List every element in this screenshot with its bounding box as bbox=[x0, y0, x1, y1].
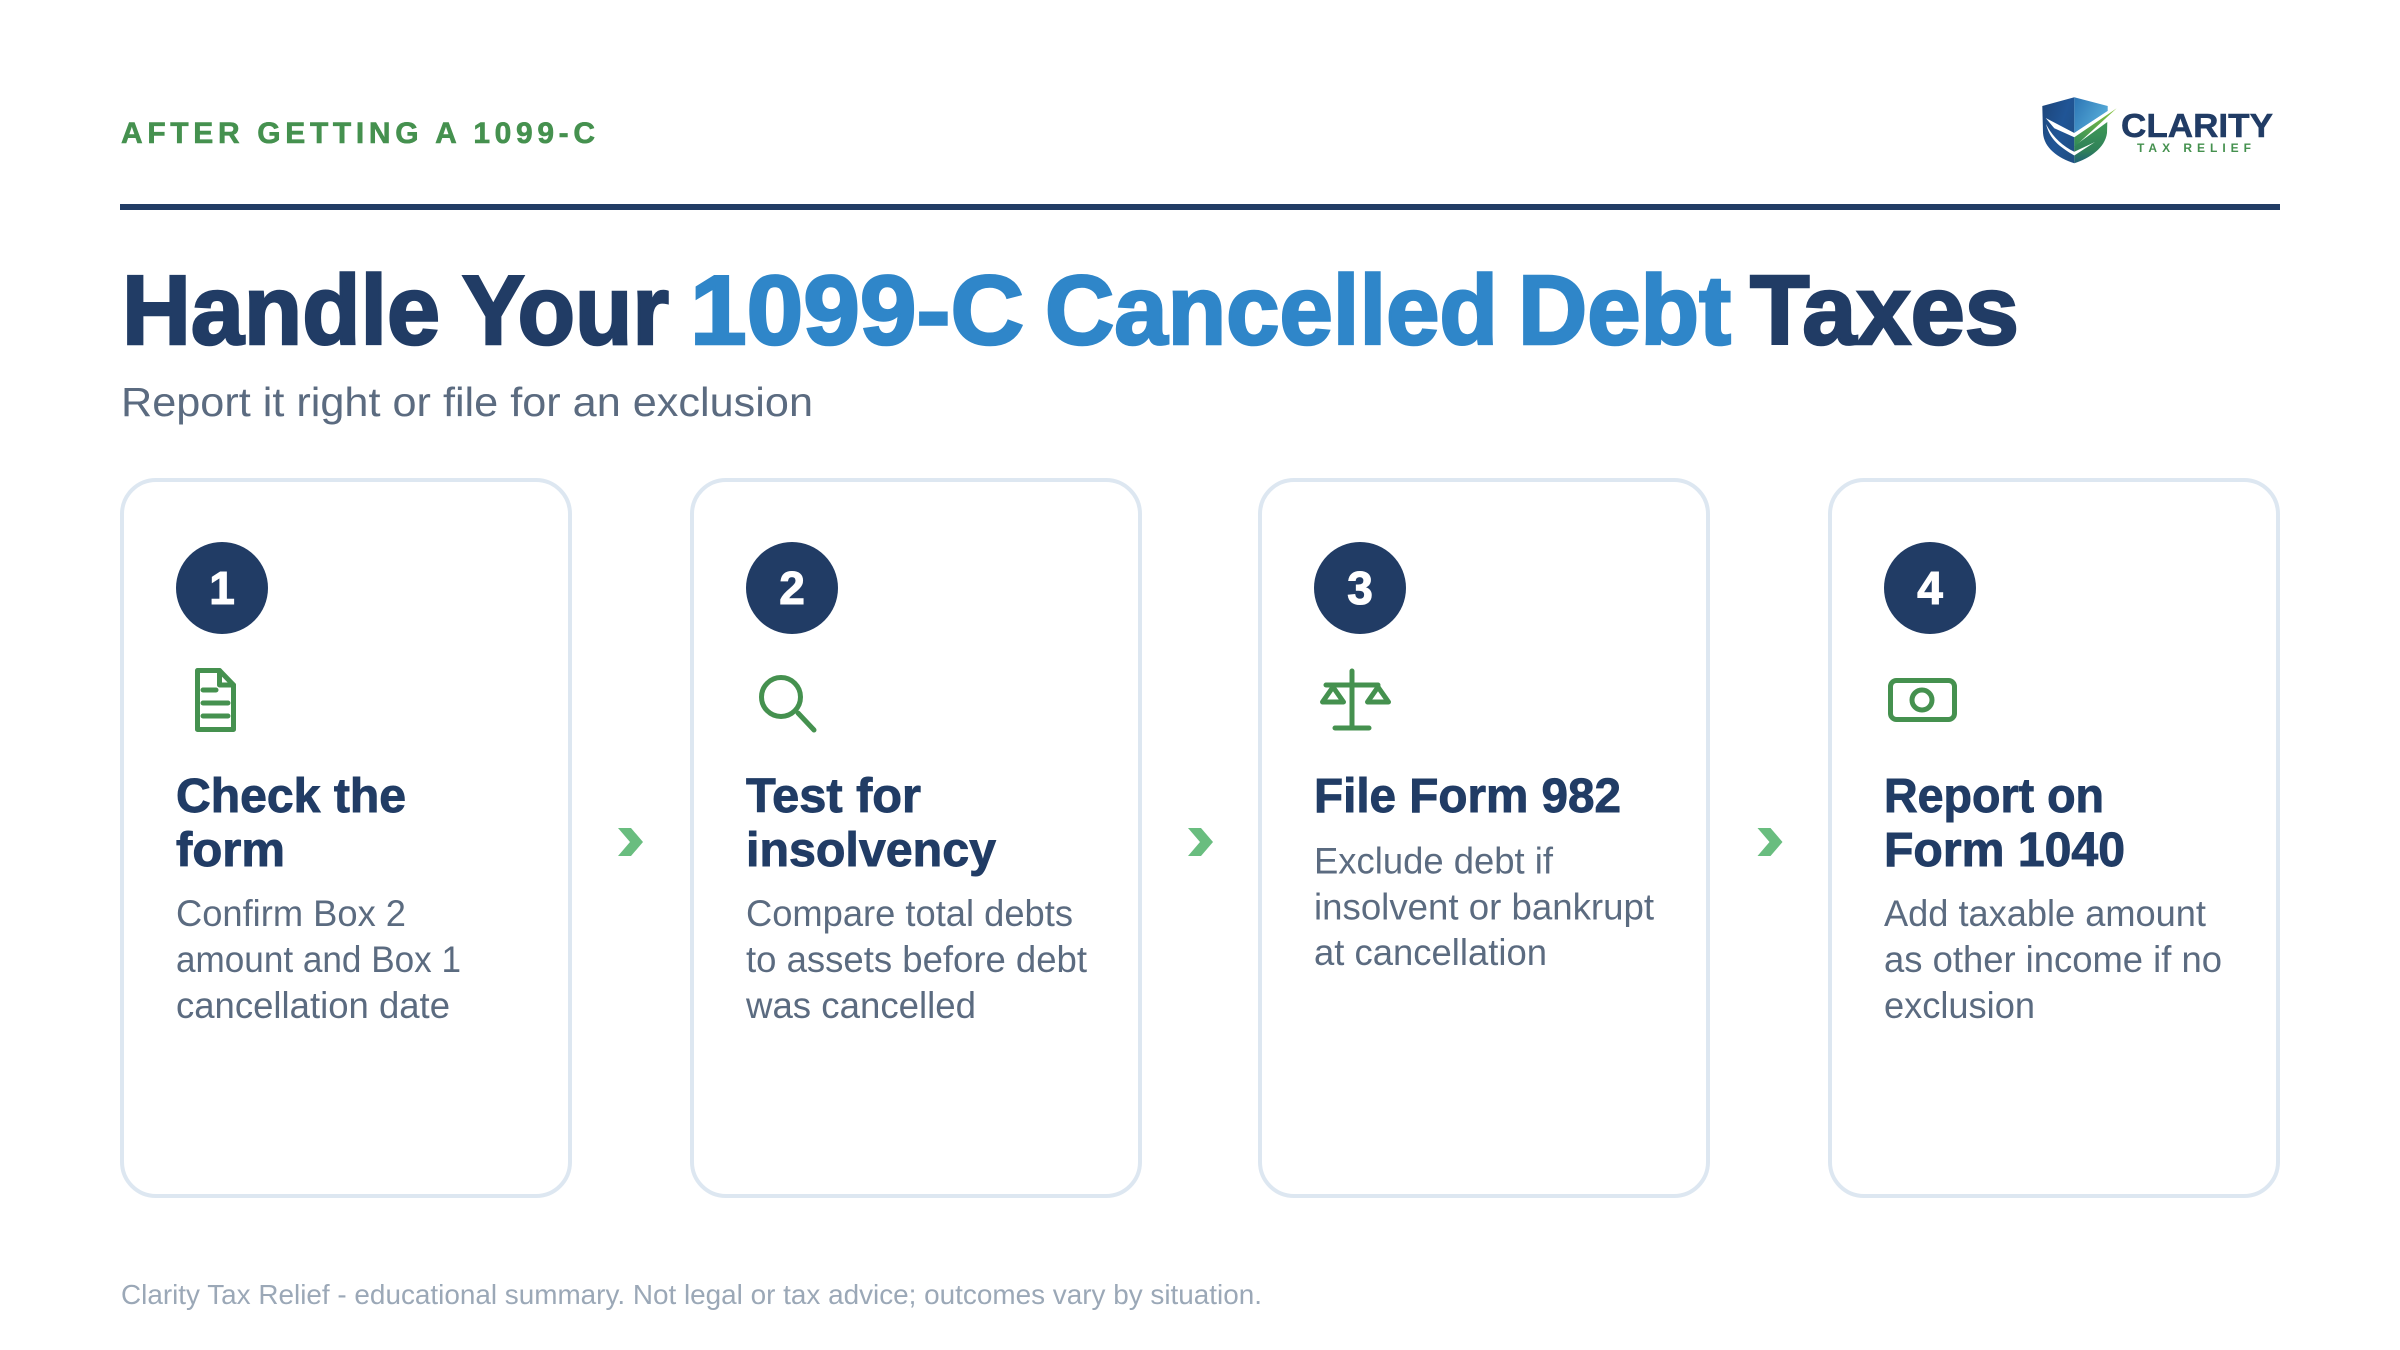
header rule bbox=[120, 204, 2280, 210]
step 1 heading: form bbox=[176, 824, 285, 877]
logo: Clarity Tax Relief bbox=[2042, 97, 2273, 163]
step number 2: 2 bbox=[779, 562, 805, 614]
panel: step 1 bbox=[122, 480, 570, 1196]
step 4 description: as other income if no bbox=[1884, 939, 2222, 980]
title: Cancelled bbox=[1045, 255, 1498, 365]
step 4 description bbox=[1884, 893, 2222, 1026]
icon: banknote bbox=[1890, 680, 1954, 720]
icon: magnifier bbox=[762, 678, 814, 730]
panel: step 4 bbox=[1830, 480, 2278, 1196]
title: Debt bbox=[1518, 255, 1731, 365]
eyebrow label: AFTER GETTING A 1099-C bbox=[121, 117, 595, 150]
logo tagline: TAX RELIEF bbox=[2137, 141, 2251, 155]
step 3 heading: File Form 982 bbox=[1314, 770, 1621, 823]
footer disclaimer: Clarity Tax Relief - educational summary. Not legal or tax advice; outcomes vary by situation. bbox=[121, 1279, 1262, 1310]
step 3 description bbox=[1314, 840, 1655, 973]
title bbox=[122, 255, 2019, 365]
step 4 heading bbox=[1884, 770, 2125, 877]
panel: step 3 bbox=[1260, 480, 1708, 1196]
subtitle: Report it right or file for an exclusion bbox=[121, 379, 813, 425]
step number 4 bbox=[1884, 542, 1976, 634]
step 1 heading bbox=[176, 770, 406, 877]
step 1 description bbox=[176, 893, 461, 1026]
step 3 description: Exclude debt if bbox=[1314, 840, 1554, 882]
step number 3: 3 bbox=[1347, 562, 1373, 614]
step 3 description: insolvent or bankrupt bbox=[1314, 886, 1655, 928]
step 4 heading: Form 1040 bbox=[1884, 824, 2125, 877]
step number 4: 4 bbox=[1917, 562, 1943, 614]
title: Your bbox=[462, 255, 669, 365]
step 4 description: exclusion bbox=[1884, 985, 2035, 1026]
step 2 heading: insolvency bbox=[746, 824, 996, 877]
step 1 heading: Check the bbox=[176, 770, 406, 823]
arrow 3 bbox=[1758, 828, 1782, 856]
step 4 heading: Report on bbox=[1884, 770, 2104, 823]
step number 1: 1 bbox=[209, 562, 235, 614]
step number 2 bbox=[746, 542, 838, 634]
step 2 description: to assets before debt bbox=[746, 939, 1088, 980]
title: Taxes bbox=[1750, 255, 2019, 365]
icon: scales bbox=[1322, 671, 1388, 728]
icon: document bbox=[198, 670, 234, 730]
step 2 description: was cancelled bbox=[745, 985, 976, 1026]
arrow 2 bbox=[1188, 828, 1213, 856]
step 2 heading bbox=[746, 770, 996, 877]
step 2 heading: Test for bbox=[746, 770, 921, 823]
step 2 description: Compare total debts bbox=[746, 893, 1073, 934]
panel: step 2 bbox=[692, 480, 1140, 1196]
step 1 description: Confirm Box 2 bbox=[176, 893, 406, 934]
step 2 description bbox=[745, 893, 1088, 1026]
step number 1 bbox=[176, 542, 268, 634]
step 4 description: Add taxable amount bbox=[1884, 893, 2207, 934]
title: 1099-C bbox=[690, 255, 1024, 365]
logo wordmark: CLARITY bbox=[2121, 107, 2273, 144]
title: Handle bbox=[122, 255, 440, 365]
step 3 description: at cancellation bbox=[1314, 932, 1547, 973]
icon: shield with check bbox=[2042, 97, 2117, 163]
step 1 description: cancellation date bbox=[176, 985, 450, 1026]
step number 3 bbox=[1314, 542, 1406, 634]
step 1 description: amount and Box 1 bbox=[176, 939, 461, 980]
arrow 1 bbox=[618, 828, 643, 856]
